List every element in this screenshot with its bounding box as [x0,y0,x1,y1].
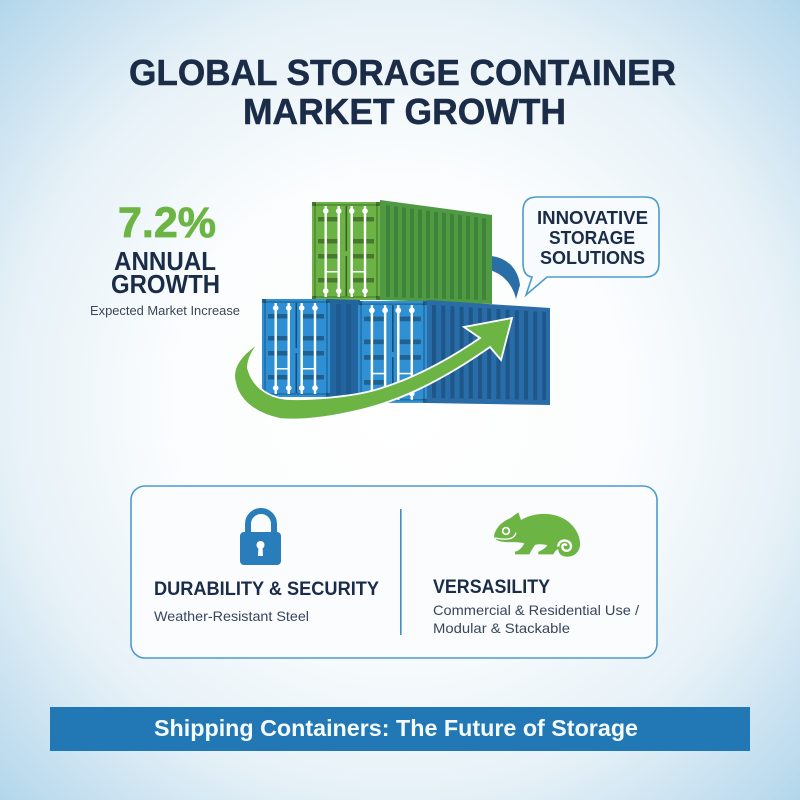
blue container right [358,300,550,405]
icon: padlock [240,511,281,565]
growth arrow [234,318,512,420]
stat value: 7.2% [118,199,216,247]
speech bubble: innovative storage solutions: INNOVATIVE [537,208,648,228]
speech bubble: innovative storage solutions: STORAGE [549,228,635,248]
stat label: ANNUAL [114,246,216,276]
divider [400,509,402,635]
footer banner: Shipping Containers: The Future of Storage [154,715,638,741]
stat: annual growth [90,199,240,318]
stat label [111,246,220,299]
speech bubble: innovative storage solutions [523,197,659,295]
speech bubble: innovative storage solutions: SOLUTIONS [540,248,645,268]
container stack illustration [262,200,550,405]
text: versatility description: Modular & Stackable [433,620,570,636]
features panel [131,486,657,658]
stat caption: Expected Market Increase [90,303,240,318]
heading: versasility: VERSASILITY [433,577,550,598]
title: MARKET GROWTH [243,91,566,132]
text: weather-resistant steel: Weather-Resistant Steel [154,608,309,624]
footer banner [50,707,750,751]
green container [312,200,492,304]
heading: durability & security: DURABILITY & SECURITY [154,579,379,600]
blue container left [262,299,360,400]
title: GLOBAL STORAGE CONTAINER [129,52,676,93]
title [129,52,676,132]
icon: chameleon [494,512,580,557]
blue curved arrow behind containers [490,256,520,299]
stat label: GROWTH [111,269,220,299]
text: versatility description [433,602,639,636]
text: versatility description: Commercial & Residential Use / [433,602,639,618]
